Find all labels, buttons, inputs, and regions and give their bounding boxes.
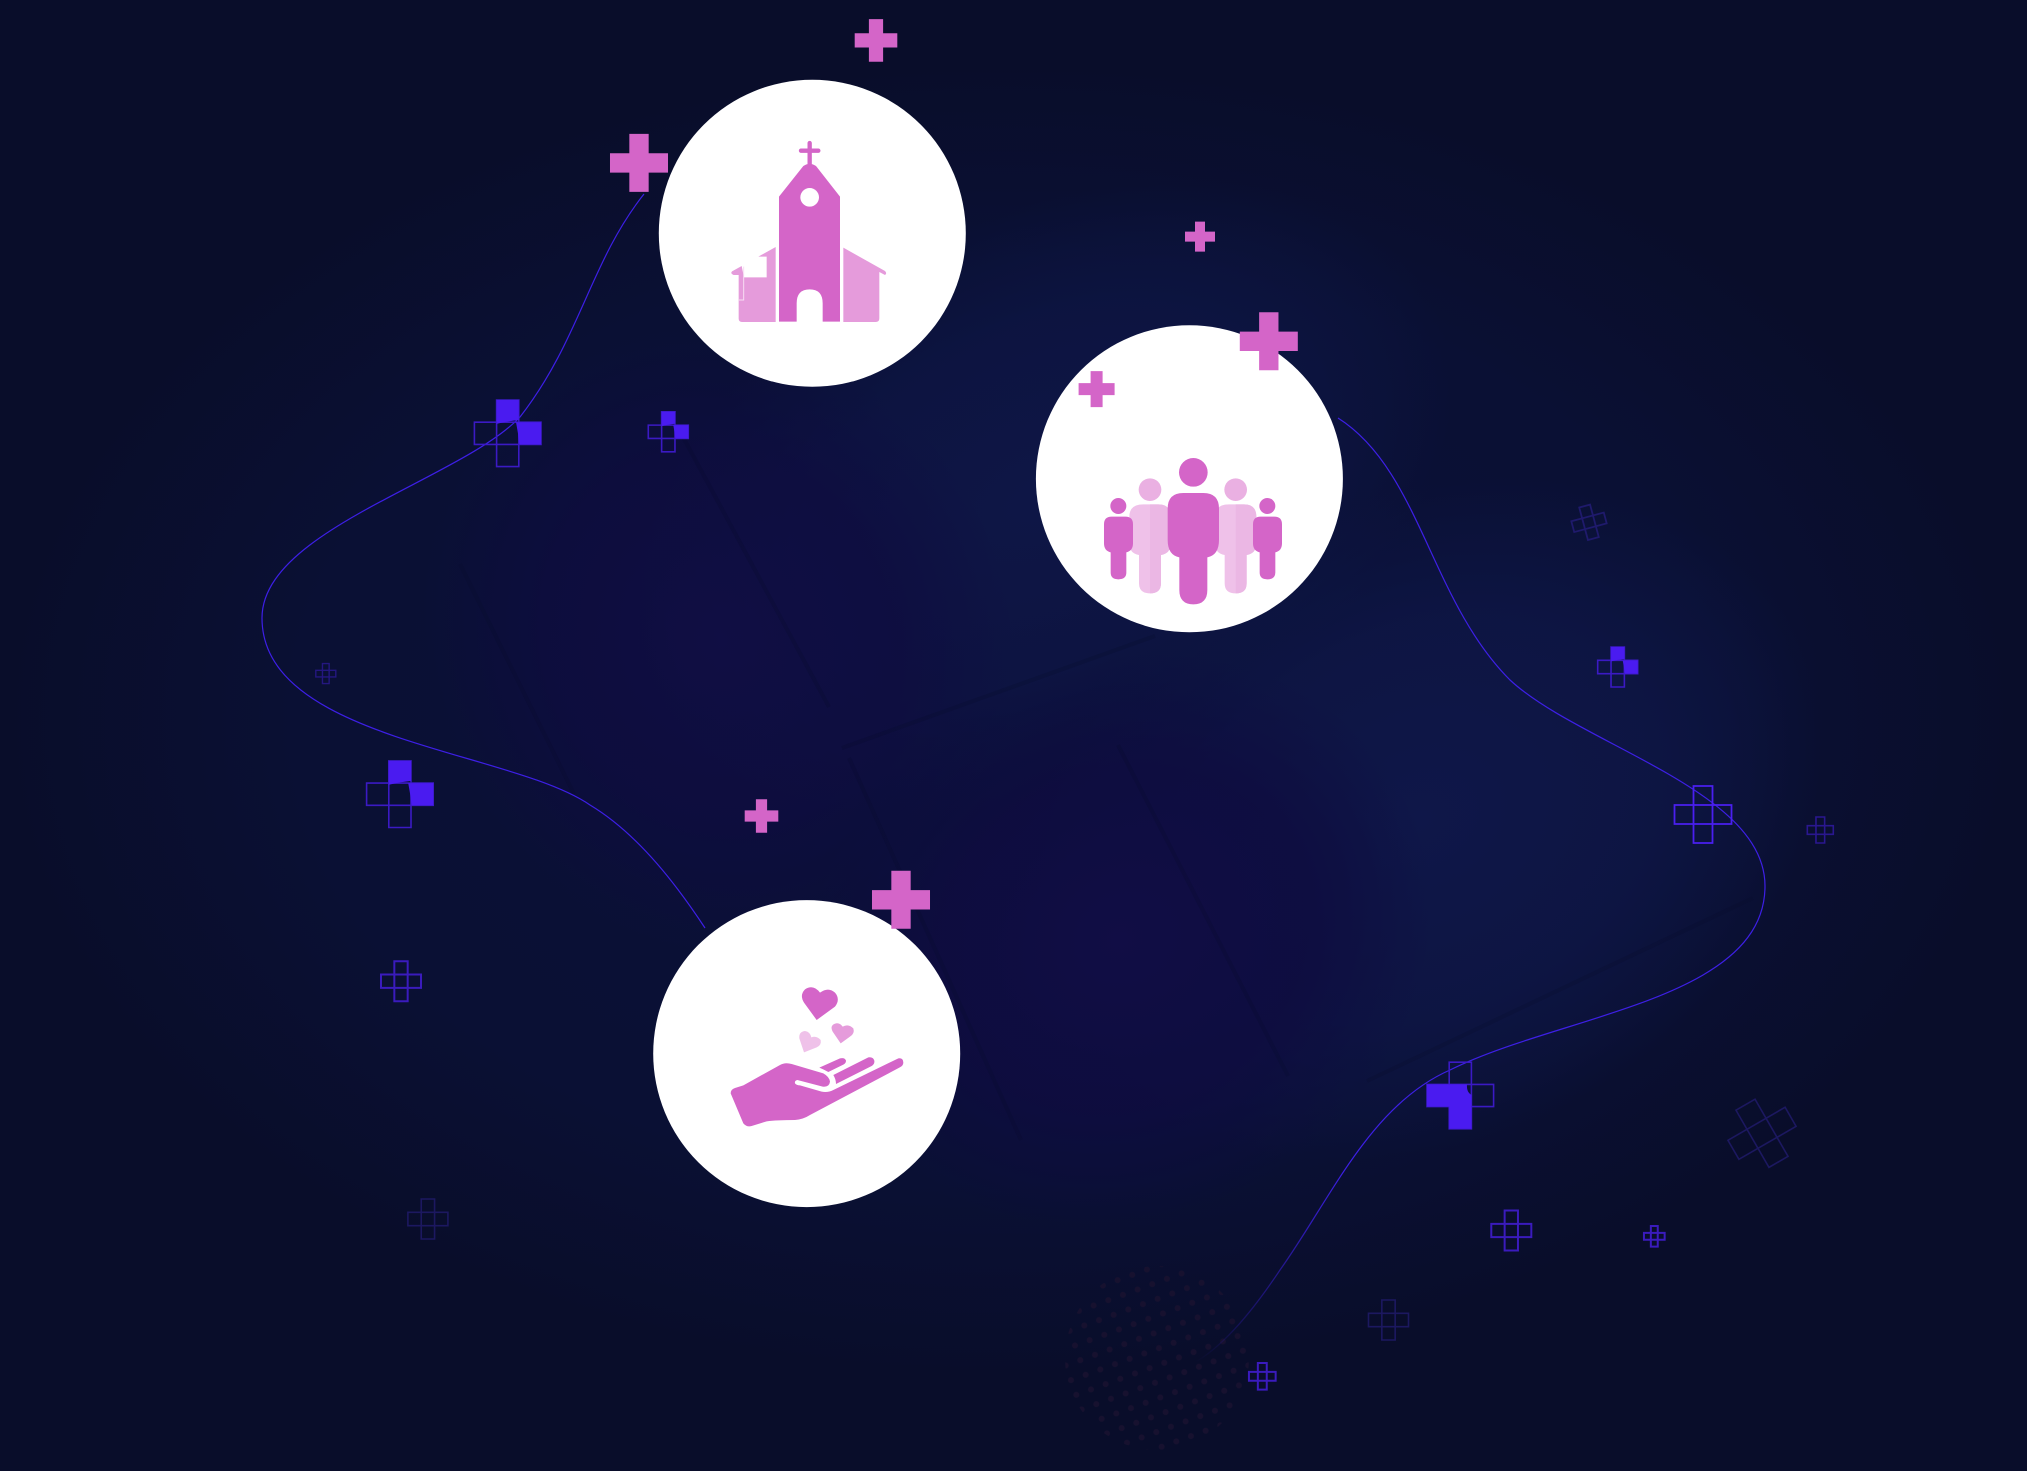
- icon: church: [731, 143, 886, 322]
- circle: church: [659, 80, 966, 387]
- pink plus markers: [610, 19, 1298, 929]
- connector curve right: [1190, 418, 1765, 1365]
- icon: group of people: [1104, 458, 1282, 604]
- dot pattern: [1065, 1266, 1249, 1450]
- icon: hand with hearts: [731, 987, 903, 1126]
- circle: giving hand: [653, 900, 960, 1207]
- outline plus markers: [316, 502, 1833, 1390]
- two-tone plus markers: [367, 400, 1638, 1129]
- circle: people: [1036, 325, 1343, 632]
- connector curve left: [262, 194, 705, 928]
